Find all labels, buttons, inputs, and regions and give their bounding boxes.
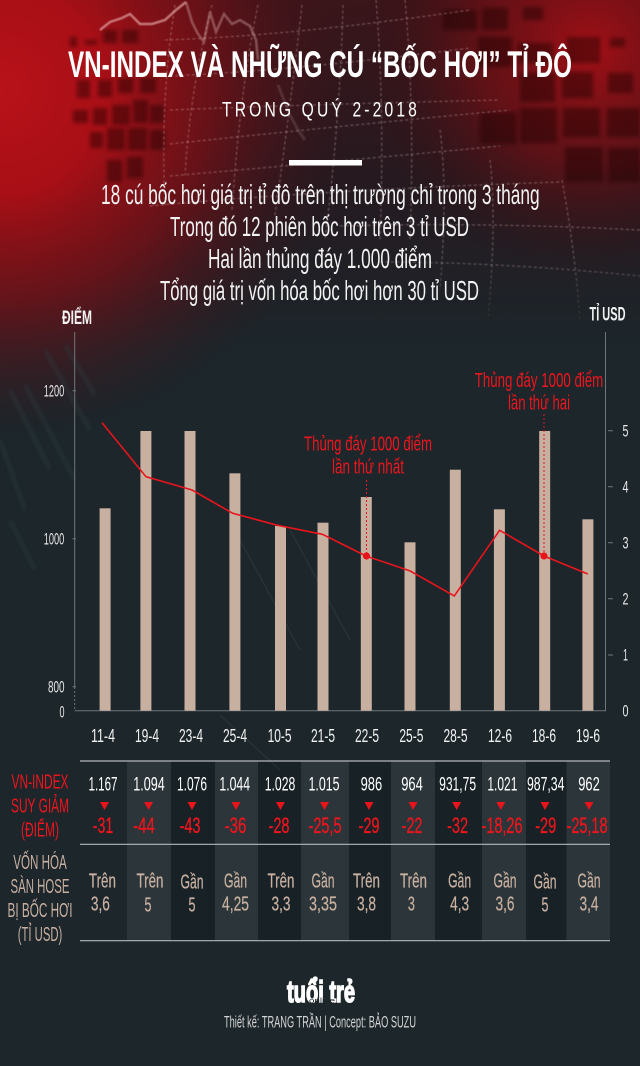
market cap values: 3,3: [272, 894, 290, 916]
date labels: [91, 726, 600, 746]
market cap values: 4,3: [450, 894, 469, 916]
index values: 1.044: [219, 774, 250, 796]
market cap qualifiers: Trên: [400, 870, 427, 892]
annotation: second breach: [475, 370, 603, 414]
point drops: -28: [268, 813, 290, 838]
point drops: [93, 813, 608, 838]
left axis labels: 1200: [44, 382, 64, 400]
point drops: -36: [225, 813, 246, 838]
left axis labels: 0: [60, 702, 64, 722]
market cap values: 3,8: [357, 894, 376, 916]
row heading: VN-Index drop: SUY GIẢM: [11, 794, 69, 818]
index values: [88, 774, 600, 796]
market cap qualifiers: Trên: [89, 870, 116, 892]
point drops: -18,26: [482, 813, 522, 838]
market cap values: 5: [542, 894, 548, 916]
market cap values: 3,6: [91, 894, 110, 916]
index values: 1.028: [265, 774, 295, 796]
right axis labels: 5: [622, 422, 628, 440]
row heading: market cap: [8, 850, 72, 946]
market cap qualifiers: Gần: [578, 870, 600, 892]
divider bar: [289, 160, 362, 166]
index values: 964: [401, 774, 423, 796]
right axis labels: [622, 422, 628, 720]
market cap values: 3: [408, 894, 415, 916]
right axis labels: 1: [623, 646, 628, 664]
date labels: 25-4: [223, 726, 247, 746]
point drops: -29: [358, 813, 380, 838]
date labels: 22-5: [355, 726, 379, 746]
annotation: first breach: Thủng đáy 1000 điểm: [304, 434, 432, 456]
row heading: VN-Index drop: VN-INDEX: [12, 770, 69, 794]
annotation: first breach: lần thứ nhất: [332, 456, 404, 478]
data table: [8, 761, 610, 946]
down triangles: [100, 802, 594, 810]
credits: Thiết kế: TRANG TRẦN | Concept: BẢO SUZU: [224, 1012, 416, 1032]
market cap values: 3,6: [496, 894, 514, 916]
point drops: -22: [402, 813, 422, 838]
right axis labels: 0: [622, 702, 628, 720]
row heading: VN-Index drop: [11, 770, 69, 842]
column stripes: [127, 761, 610, 941]
annotation: second breach: lần thứ hai: [508, 392, 570, 414]
date labels: 18-6: [532, 726, 556, 746]
axis titles: ĐIỂM: [62, 307, 92, 329]
logo: Tuoi Tre Online: tuổi trẻ: [287, 974, 355, 1009]
date labels: 28-5: [444, 726, 468, 746]
index values: 931,75: [439, 774, 476, 796]
date labels: 19-6: [576, 726, 600, 746]
left axis labels: 800: [48, 678, 65, 696]
index values: 986: [361, 774, 382, 796]
market cap qualifiers: Gần: [534, 872, 556, 894]
annotation leader lines: [366, 414, 544, 556]
annotation: first breach: [304, 434, 432, 478]
point drops: -29: [535, 813, 556, 838]
index values: 1.021: [487, 774, 517, 796]
date labels: 12-6: [488, 726, 512, 746]
index values: 1.076: [177, 774, 207, 796]
axis titles: [62, 304, 626, 329]
market cap values: 3,35: [309, 894, 337, 916]
index values: 962: [578, 774, 600, 796]
axes: [72, 332, 613, 711]
date labels: 21-5: [311, 726, 335, 746]
row heading: market cap: (TỈ USD): [18, 923, 62, 946]
point drops: -31: [93, 813, 113, 838]
bars: market cap lost: [100, 431, 593, 711]
row heading: market cap: SÀN HOSE: [10, 875, 70, 898]
market cap values: 5: [144, 894, 152, 916]
market cap qualifiers: Trên: [136, 870, 164, 892]
right axis labels: 4: [622, 478, 628, 496]
right axis labels: 3: [622, 534, 628, 552]
market cap values: 4,25: [222, 894, 249, 916]
market cap qualifiers: Gần: [180, 872, 204, 894]
table rules: [80, 761, 610, 941]
index values: 1.015: [308, 774, 340, 796]
row heading: market cap: VỐN HÓA: [13, 850, 67, 874]
index values: 1.167: [88, 774, 118, 796]
market cap qualifiers: Gần: [312, 870, 334, 892]
market cap values: [91, 894, 599, 916]
market cap qualifiers: Gần: [448, 870, 471, 892]
left axis labels: 1000: [44, 530, 64, 548]
markers: [363, 552, 548, 560]
subtitle: TRONG QUÝ 2-2018: [222, 98, 420, 122]
combo chart: [44, 304, 628, 746]
date labels: 25-5: [399, 726, 423, 746]
logo: Tuoi Tre Online: online: [309, 996, 335, 1005]
point drops: -43: [180, 813, 200, 838]
summary text block: Hai lần thủng đáy 1.000 điểm: [208, 243, 432, 274]
point drops: -44: [133, 813, 155, 838]
market cap values: 3,4: [580, 894, 598, 916]
market cap qualifiers: [89, 870, 600, 894]
right axis labels: 2: [622, 590, 628, 608]
index values: 987,34: [527, 774, 565, 796]
date labels: 19-4: [135, 726, 159, 746]
line: VN-Index: [102, 423, 588, 596]
market cap values: 5: [188, 894, 196, 916]
logo: Tuoi Tre Online: [287, 974, 355, 1009]
background: [0, 0, 640, 770]
point drops: -32: [447, 813, 468, 838]
date labels: 11-4: [91, 726, 115, 746]
index values: 1.094: [133, 774, 165, 796]
row heading: market cap: BỊ BỐC HƠI: [8, 898, 72, 922]
summary text block: [101, 179, 540, 306]
date labels: 23-4: [179, 726, 203, 746]
point drops: -25,5: [308, 813, 342, 838]
market cap qualifiers: Trên: [353, 870, 380, 892]
row heading: VN-Index drop: (ĐIỂM): [21, 818, 59, 842]
date labels: 10-5: [268, 726, 292, 746]
market cap qualifiers: Gần: [224, 870, 247, 892]
market cap qualifiers: Gần: [494, 870, 516, 892]
point drops: -25,18: [566, 813, 608, 838]
left axis labels: [44, 382, 65, 722]
market cap qualifiers: Trên: [268, 870, 294, 892]
